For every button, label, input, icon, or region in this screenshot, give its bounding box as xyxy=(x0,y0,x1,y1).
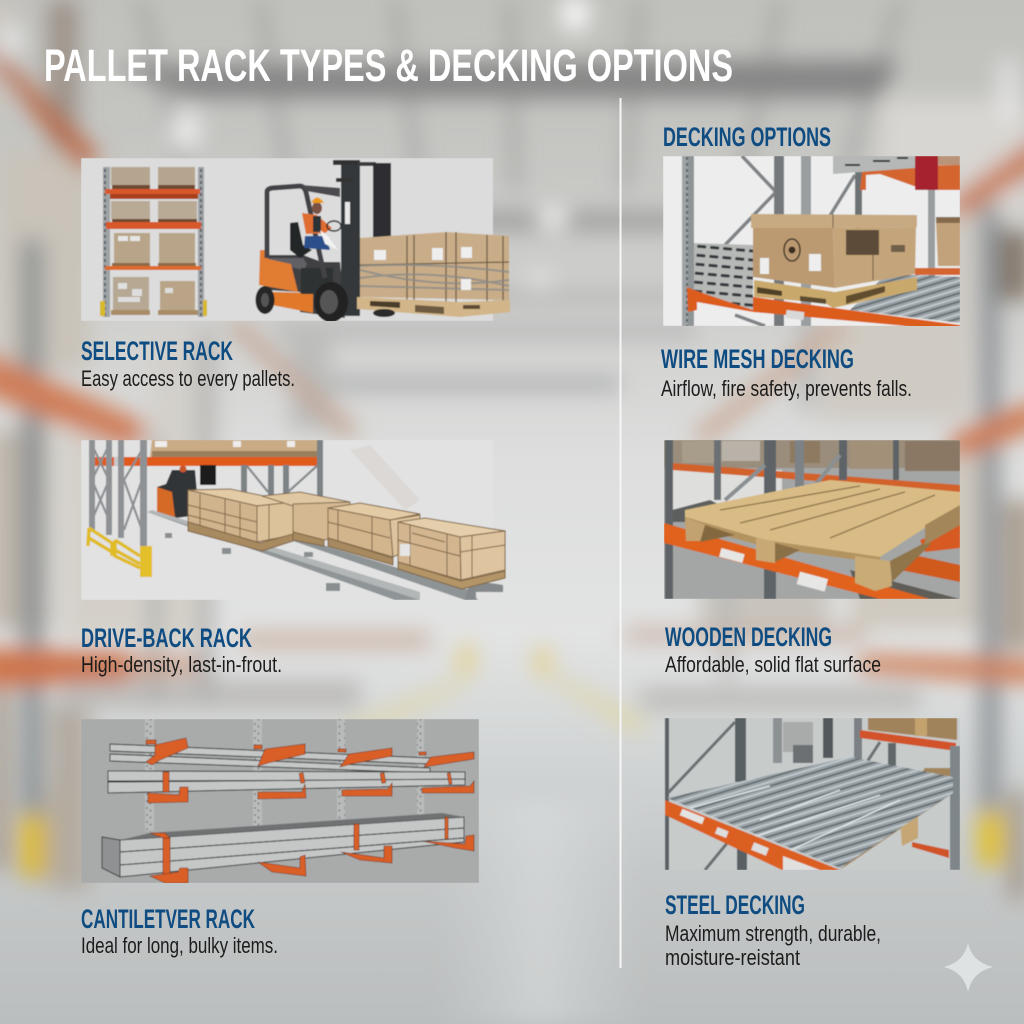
heading: cantilever rack: CANTILETVER RACK xyxy=(81,904,255,934)
icon: forklift xyxy=(256,160,391,322)
wire mesh decking image xyxy=(663,156,960,327)
description: steel decking xyxy=(665,921,881,970)
description: wooden decking: Affordable, solid flat surface xyxy=(665,652,881,677)
heading: steel decking: STEEL DECKING xyxy=(665,890,805,920)
heading: wire mesh decking: WIRE MESH DECKING xyxy=(661,344,854,374)
description: selective rack: Easy access to every pallets. xyxy=(81,366,295,391)
wooden decking image xyxy=(664,440,960,599)
drive-back rack image xyxy=(81,440,505,600)
panel: wire mesh decking xyxy=(661,156,960,401)
panel: cantilever rack xyxy=(81,719,479,958)
description: drive-back rack: High-density, last-in-frout. xyxy=(81,652,282,677)
panel: drive-back rack xyxy=(81,440,505,677)
heading: selective rack: SELECTIVE RACK xyxy=(81,336,233,366)
panel: steel decking xyxy=(664,718,960,970)
column divider line xyxy=(620,98,622,968)
panel: wooden decking xyxy=(664,440,960,677)
steel decking image xyxy=(664,718,960,870)
description: wire mesh decking: Airflow, fire safety, prevents falls. xyxy=(661,376,912,401)
heading: drive-back rack: DRIVE-BACK RACK xyxy=(81,623,252,653)
description: cantilever rack: Ideal for long, bulky items. xyxy=(81,933,278,958)
icon: sparkle watermark xyxy=(944,943,993,992)
description: steel decking: Maximum strength, durable, xyxy=(665,921,881,946)
crate row xyxy=(188,489,505,589)
description: steel decking: moisture-reistant xyxy=(665,945,800,970)
title: PALLET RACK TYPES & DECKING OPTIONS xyxy=(44,40,733,91)
selective rack image xyxy=(81,158,510,322)
section heading: decking options: DECKING OPTIONS xyxy=(663,122,831,152)
heading: wooden decking: WOODEN DECKING xyxy=(665,622,832,652)
cantilever rack image xyxy=(81,719,479,883)
icon: wrapped pallet load xyxy=(357,232,510,317)
panel: selective rack xyxy=(81,158,510,391)
